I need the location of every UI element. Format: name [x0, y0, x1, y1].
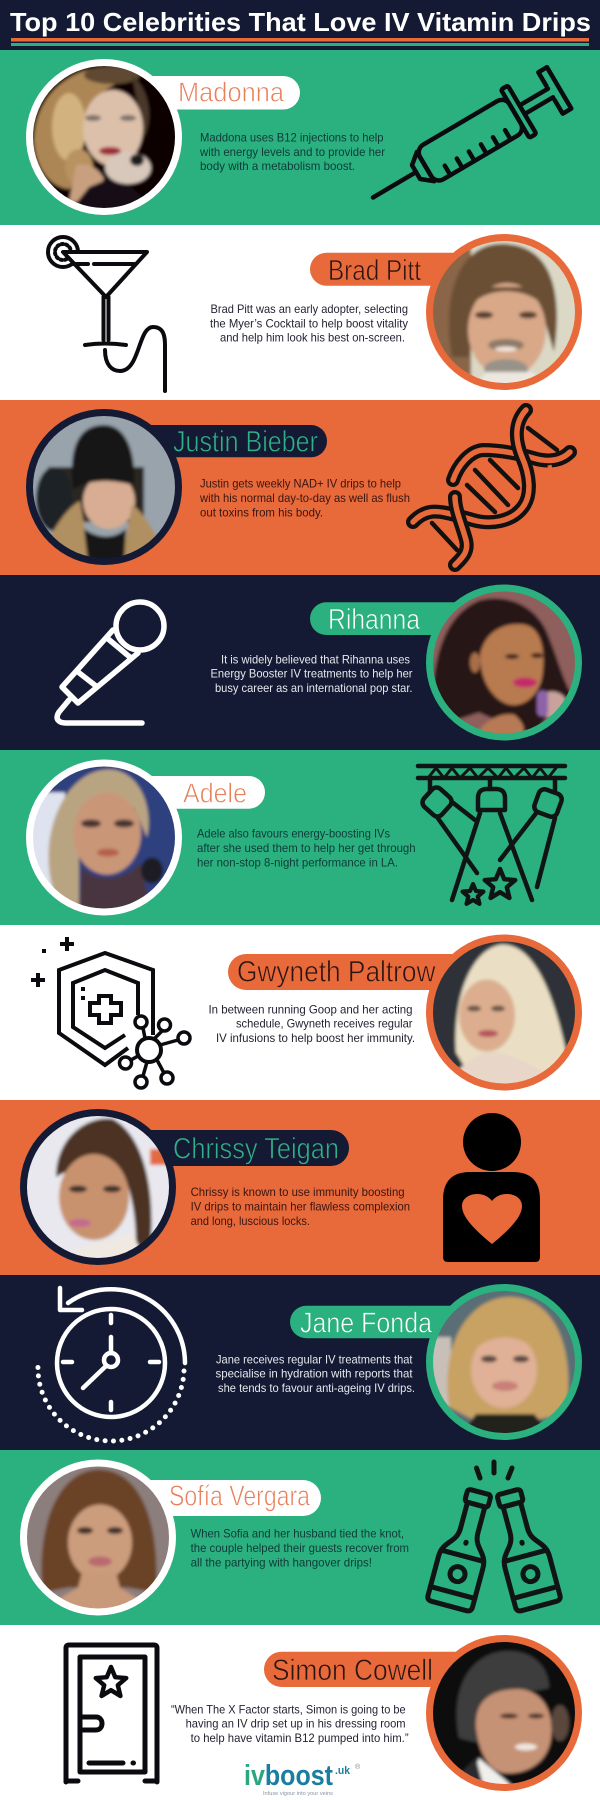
- description: Justin Bieber: out toxins from his body.: [200, 506, 323, 520]
- description: Brad Pitt: and help him look his best on-screen.: [220, 331, 405, 345]
- portrait: Madonna: [26, 59, 182, 215]
- description: Justin Bieber: [199, 477, 410, 520]
- logo: ivboost.uk: ®: [355, 1763, 361, 1771]
- portrait: Adele: [26, 760, 182, 916]
- portrait: Gwyneth Paltrow: [426, 934, 582, 1090]
- name pill: Brad Pitt: [310, 253, 504, 287]
- header: [0, 0, 600, 50]
- icon: microphone: [57, 602, 164, 723]
- name pill: Sofia Vergara: Sofía Vergara: [169, 1481, 311, 1513]
- name pill: Adele: Adele: [183, 778, 247, 809]
- description: Sofia Vergara: the couple helped their guests recover from: [191, 1541, 409, 1555]
- description: Simon Cowell: having an IV drip set up in his dressing room: [186, 1717, 406, 1731]
- description: Rihanna: busy career as an international pop star.: [215, 681, 412, 695]
- panel: Simon Cowell: [64, 1635, 582, 1796]
- panel: Jane Fonda: [0, 1275, 600, 1450]
- description: Rihanna: It is widely believed that Rihanna uses: [221, 652, 410, 666]
- name pill: Jane Fonda: [290, 1306, 504, 1339]
- name pill: Brad Pitt: Brad Pitt: [328, 255, 421, 287]
- name pill: Justin Bieber: [104, 425, 327, 459]
- description: Chrissy Teigan: [191, 1185, 410, 1228]
- name pill: Madonna: [104, 76, 300, 110]
- portrait: Rihanna: [426, 584, 582, 740]
- description: Gwyneth Paltrow: schedule, Gwyneth receives regular: [236, 1017, 413, 1031]
- description: Jane Fonda: she tends to favour anti-ageing IV drips.: [218, 1381, 415, 1395]
- description: Madonna: body with a metabolism boost.: [200, 159, 355, 173]
- portrait: Jane Fonda: [426, 1284, 582, 1440]
- panel: Sofia Vergara: [0, 1450, 600, 1625]
- panel: Madonna: [0, 50, 600, 225]
- description: Sofia Vergara: [191, 1527, 409, 1570]
- name pill: Rihanna: Rihanna: [328, 604, 421, 636]
- icon: immunity shield and virus: [31, 937, 190, 1088]
- description: Adele: after she used them to help her get through: [197, 841, 416, 855]
- icon: DNA helix: [413, 410, 570, 565]
- panel: Rihanna: [0, 575, 600, 750]
- name pill: Rihanna: [310, 602, 504, 636]
- description: Madonna: with energy levels and to provide her: [199, 145, 385, 159]
- description: Simon Cowell: “When The X Factor starts, Simon is going to be: [171, 1702, 406, 1716]
- description: Sofia Vergara: When Sofia and her husband tied the knot,: [191, 1527, 404, 1541]
- description: Adele: Adele also favours energy-boosting IVs: [197, 827, 390, 841]
- description: Madonna: Maddona uses B12 injections to help: [200, 130, 384, 144]
- description: Gwyneth Paltrow: [208, 1002, 415, 1045]
- description: Jane Fonda: specialise in hydration with reports that: [216, 1367, 413, 1381]
- portrait: Simon Cowell: [426, 1635, 582, 1791]
- portrait: Justin Bieber: [26, 409, 182, 565]
- name pill: Jane Fonda: Jane Fonda: [300, 1307, 433, 1339]
- description: Brad Pitt: the Myer’s Cocktail to help boost vitality: [210, 316, 408, 330]
- description: Gwyneth Paltrow: IV infusions to help boost her immunity.: [216, 1031, 415, 1045]
- icon: stage lights: [418, 766, 565, 904]
- description: Chrissy Teigan: Chrissy is known to use immunity boosting: [191, 1185, 405, 1199]
- name pill: Madonna: Madonna: [178, 77, 284, 108]
- logo: ivboost.uk: ivboost: [244, 1760, 333, 1792]
- panel: Chrissy Teigan: [0, 1100, 600, 1275]
- portrait: Chrissy Teigan: [20, 1109, 176, 1265]
- logo: ivboost.uk: .uk: [335, 1765, 351, 1777]
- name pill: Chrissy Teigan: Chrissy Teigan: [173, 1132, 339, 1165]
- description: Simon Cowell: to help have vitamin B12 pumped into him.”: [191, 1731, 409, 1745]
- name pill: Simon Cowell: Simon Cowell: [272, 1654, 433, 1687]
- title: Top 10 Celebrities That Love IV Vitamin Drips: [10, 7, 591, 37]
- panel: Adele: [0, 750, 600, 925]
- panel: Gwyneth Paltrow: [31, 934, 582, 1090]
- name pill: Sofia Vergara: [98, 1480, 321, 1516]
- logo: ivboost.uk: Infuse vigour into your veins: [263, 1791, 334, 1797]
- description: Simon Cowell: [171, 1702, 409, 1745]
- icon: syringe: [359, 64, 573, 222]
- name pill: Chrissy Teigan: [98, 1130, 349, 1166]
- portrait: Sofia Vergara: [20, 1460, 176, 1616]
- name pill: Adele: [104, 776, 265, 809]
- description: Madonna: [199, 130, 385, 173]
- description: Jane Fonda: Jane receives regular IV treatments that: [216, 1352, 413, 1366]
- icon: clock with reverse arrow: [38, 1288, 185, 1441]
- description: Justin Bieber: with his normal day-to-day as well as flush: [199, 491, 410, 505]
- icon: clinking bottles: [427, 1462, 561, 1612]
- description: Brad Pitt: Brad Pitt was an early adopter, selecting: [210, 302, 408, 316]
- description: Justin Bieber: Justin gets weekly NAD+ IV drips to help: [200, 477, 401, 491]
- icon: dressing room door: [66, 1645, 157, 1782]
- description: Chrissy Teigan: IV drips to maintain her flawless complexion: [191, 1200, 410, 1214]
- panel: Brad Pitt: [46, 234, 582, 393]
- description: Adele: her non-stop 8-night performance in LA.: [197, 856, 398, 870]
- description: Rihanna: Energy Booster IV treatments to help her: [210, 667, 412, 681]
- panel: Justin Bieber: [0, 400, 600, 575]
- description: Brad Pitt: [210, 302, 408, 345]
- description: Rihanna: [210, 652, 412, 695]
- description: Gwyneth Paltrow: In between running Goop and her acting: [208, 1002, 412, 1016]
- description: Chrissy Teigan: and long, luscious locks.: [191, 1214, 310, 1228]
- icon: person with heart: [443, 1113, 540, 1262]
- description: Jane Fonda: [216, 1352, 415, 1395]
- name pill: Justin Bieber: Justin Bieber: [173, 426, 318, 459]
- description: Sofia Vergara: all the partying with hangover drips!: [191, 1556, 372, 1570]
- name pill: Gwyneth Paltrow: Gwyneth Paltrow: [237, 956, 436, 989]
- description: Adele: [197, 827, 416, 870]
- portrait: Brad Pitt: [426, 234, 582, 390]
- icon: martini: [48, 237, 165, 391]
